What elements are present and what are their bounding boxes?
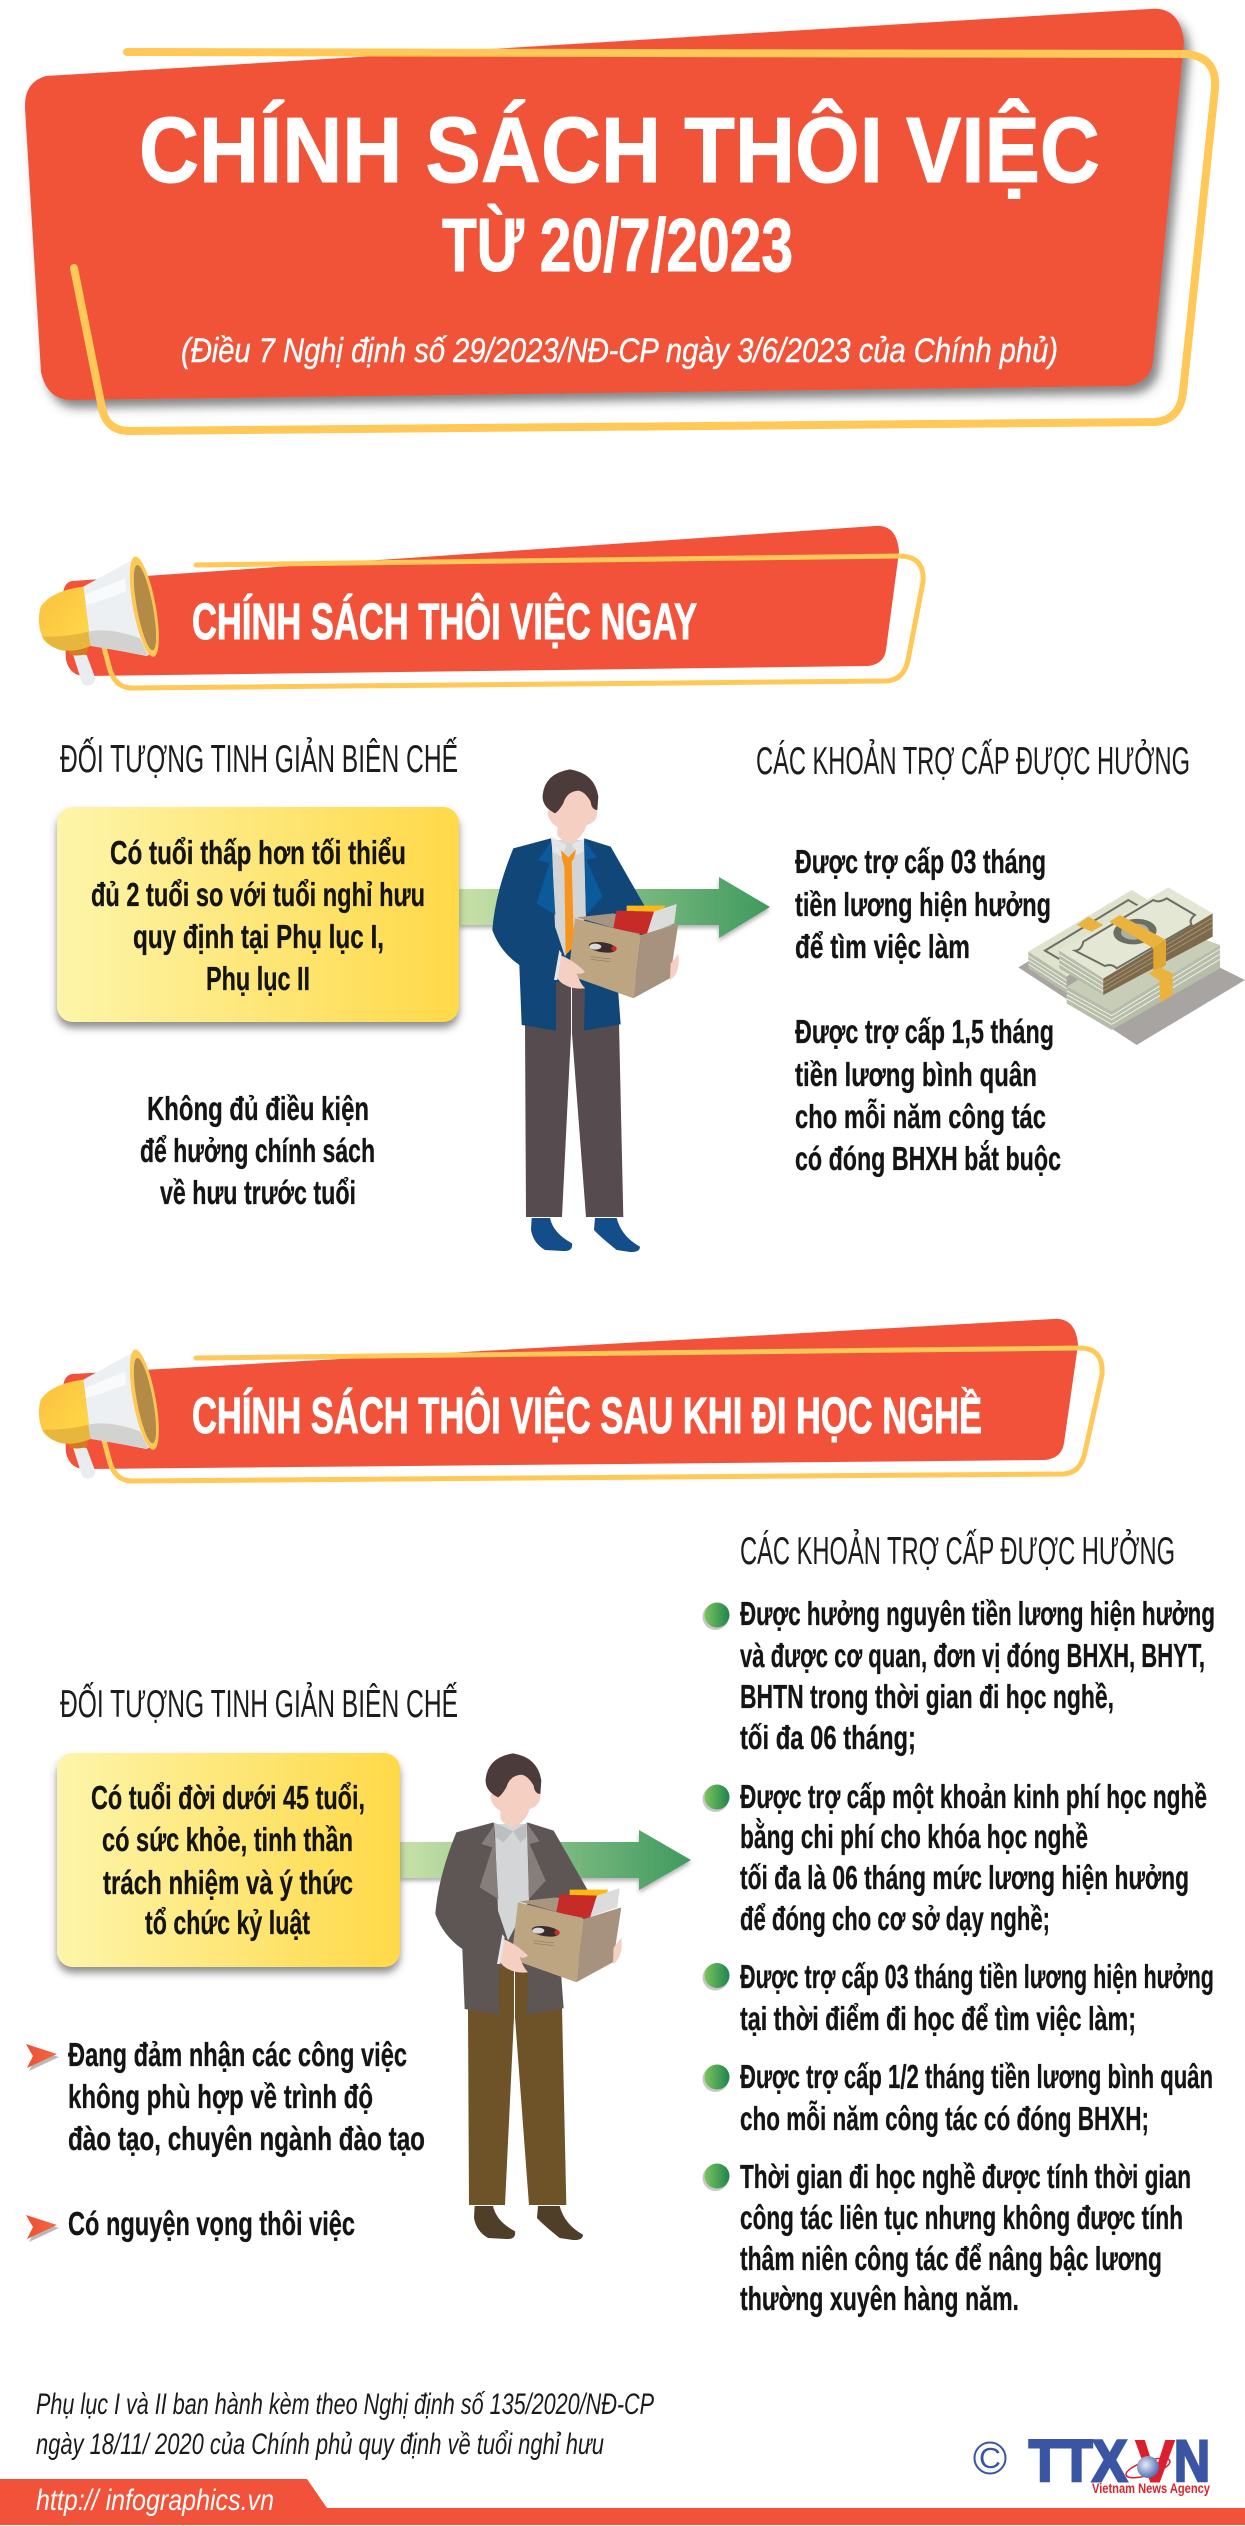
callout: age condition section 1: Có tuổi thấp hơn tối thiểu bbox=[110, 835, 406, 872]
callout: age condition section 2: trách nhiệm và ý thức bbox=[103, 1865, 353, 1902]
text block: benefits section 1: tiền lương bình quân bbox=[795, 1057, 1037, 1094]
text block: benefits section 1: Được trợ cấp 1,5 tháng bbox=[795, 1014, 1054, 1051]
callout: age condition section 2: có sức khỏe, tinh thần bbox=[102, 1822, 353, 1859]
icon: megaphone bbox=[39, 1347, 165, 1479]
callout: age condition section 1: quy định tại Phụ lục I, bbox=[133, 919, 384, 956]
icon: copyright mark bbox=[974, 2442, 1006, 2475]
heading: target group section 2: ĐỐI TƯỢNG TINH GIẢN BIÊN CHẾ bbox=[60, 1681, 458, 1726]
icon: copyright mark: C bbox=[979, 2443, 1001, 2475]
section 2 banner bbox=[39, 1319, 1102, 1481]
footer bar with url: http:// infographics.vn bbox=[36, 2484, 274, 2517]
footnote: Phụ lục I và II ban hành kèm theo Nghị định số 135/2020/NĐ-CP bbox=[36, 2388, 654, 2421]
benefit list section 2: tối đa 06 tháng; bbox=[740, 1720, 916, 1757]
illustration: man in blue suit holding box bbox=[492, 769, 679, 1252]
footnote bbox=[36, 2388, 654, 2461]
logo: TTXVN: N bbox=[1174, 2429, 1210, 2494]
text block: benefits section 1: có đóng BHXH bắt buộc bbox=[795, 1140, 1061, 1178]
text block: retirement condition bbox=[140, 1091, 375, 1212]
text block: conditions with arrow bullets: không phù hợp về trình độ bbox=[68, 2079, 373, 2116]
text block: benefits section 1: tiền lương hiện hưởng bbox=[795, 887, 1051, 924]
text block: benefits section 1: Được trợ cấp 03 tháng bbox=[795, 844, 1046, 881]
text block: benefits section 1: cho mỗi năm công tác bbox=[795, 1098, 1046, 1136]
subtitle date: TỪ 20/7/2023 bbox=[442, 203, 793, 287]
arrow: section 2 bbox=[400, 1830, 691, 1890]
section 1 heading: CHÍNH SÁCH THÔI VIỆC NGAY bbox=[192, 592, 697, 650]
benefit list section 2: bằng chi phí cho khóa học nghề bbox=[740, 1818, 1088, 1856]
text block: conditions with arrow bullets: Đang đảm nhận các công việc bbox=[68, 2037, 407, 2074]
text block: conditions with arrow bullets: đào tạo, chuyên ngành đào tạo bbox=[68, 2121, 425, 2158]
icon: green bullet bbox=[702, 2064, 730, 2092]
text block: conditions with arrow bullets: Có nguyện vọng thôi việc bbox=[68, 2206, 355, 2243]
callout: age condition section 2 bbox=[57, 1753, 400, 1967]
icon: red arrow bullet bbox=[26, 2044, 59, 2071]
icon: red arrow bullet bbox=[26, 2215, 59, 2242]
main title banner bbox=[25, 9, 1215, 431]
benefit list section 2: thường xuyên hàng năm. bbox=[740, 2281, 1019, 2318]
logo: TTXVN bbox=[974, 2428, 1210, 2496]
footer bar with url bbox=[0, 2479, 1245, 2525]
illustration: man in grey suit holding box bbox=[435, 1753, 622, 2240]
logo: TTXVN: Vietnam News Agency bbox=[1092, 2481, 1210, 2496]
icon: green bullet bbox=[702, 2164, 730, 2191]
logo: TTXVN: TTX bbox=[1029, 2429, 1127, 2494]
callout: age condition section 1 bbox=[57, 807, 459, 1022]
title: CHÍNH SÁCH THÔI VIỆC bbox=[139, 98, 1100, 202]
text block: conditions with arrow bullets bbox=[26, 2037, 425, 2243]
heading: target group section 1: ĐỐI TƯỢNG TINH GIẢN BIÊN CHẾ bbox=[60, 736, 458, 781]
icon: green bullet bbox=[702, 1963, 730, 1990]
icon: green bullet bbox=[702, 1602, 730, 1630]
icon: green bullet bbox=[702, 1784, 730, 1812]
text block: benefits section 1: để tìm việc làm bbox=[795, 929, 970, 966]
icon: money stacks bbox=[1018, 887, 1245, 1045]
legal source line: (Điều 7 Nghị định số 29/2023/NĐ-CP ngày 3/6/2023 của Chính phủ) bbox=[181, 332, 1058, 370]
logo: TTXVN: V bbox=[1135, 2428, 1175, 2495]
text block: retirement condition: về hưu trước tuổi bbox=[160, 1175, 356, 1212]
callout: age condition section 1: Phụ lục II bbox=[206, 961, 310, 998]
arrow: section 1 bbox=[459, 877, 770, 938]
footnote: ngày 18/11/ 2020 của Chính phủ quy định về tuổi nghỉ hưu bbox=[36, 2428, 604, 2461]
benefit list section 2: để đóng cho cơ sở dạy nghề; bbox=[740, 1901, 1050, 1938]
callout: age condition section 2: tổ chức kỷ luật bbox=[145, 1905, 310, 1942]
section 1 banner bbox=[39, 526, 923, 688]
icon: megaphone bbox=[39, 554, 165, 686]
callout: age condition section 2: Có tuổi đời dưới 45 tuổi, bbox=[91, 1780, 365, 1817]
text block: benefits section 1 bbox=[795, 844, 1061, 1178]
benefit list section 2 bbox=[702, 1596, 1215, 2318]
callout: age condition section 1: đủ 2 tuổi so với tuổi nghỉ hưu bbox=[91, 877, 425, 914]
text block: retirement condition: Không đủ điều kiện bbox=[147, 1091, 369, 1128]
text block: retirement condition: để hưởng chính sách bbox=[140, 1133, 375, 1170]
